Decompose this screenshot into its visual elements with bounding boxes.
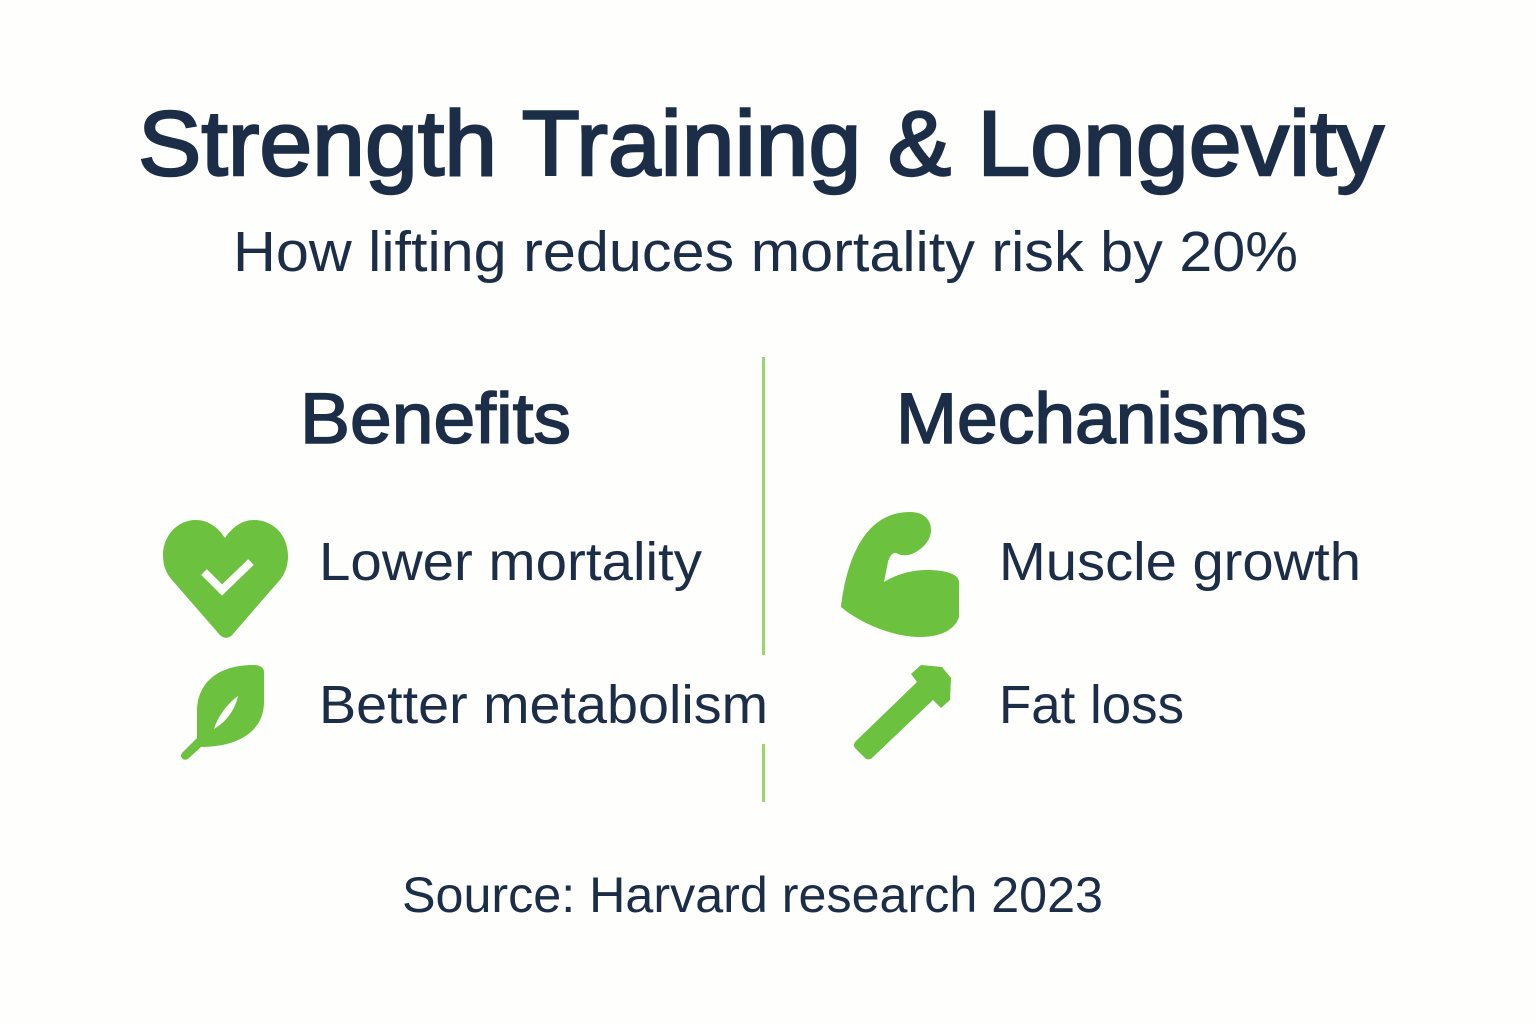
label: better metabolism: Better metabolism [319,675,768,735]
label: fat loss: Fat loss [999,675,1184,735]
heading: benefits: Benefits [300,380,571,459]
icon: arrow pointing up right [854,665,951,759]
icon: leaf [181,665,264,760]
icon: heart with check [163,520,288,638]
icon: flexed bicep [841,512,959,637]
subtitle: How lifting reduces mortality risk by 20% [233,220,1298,284]
title: Strength Training & Longevity [138,93,1384,195]
panel: mechanisms [841,380,1361,759]
heading: mechanisms: Mechanisms [896,380,1307,459]
label: muscle growth: Muscle growth [999,532,1361,592]
source note: Source: Harvard research 2023 [402,867,1103,923]
label: lower mortality: Lower mortality [319,532,702,592]
panel: benefits [163,380,768,760]
